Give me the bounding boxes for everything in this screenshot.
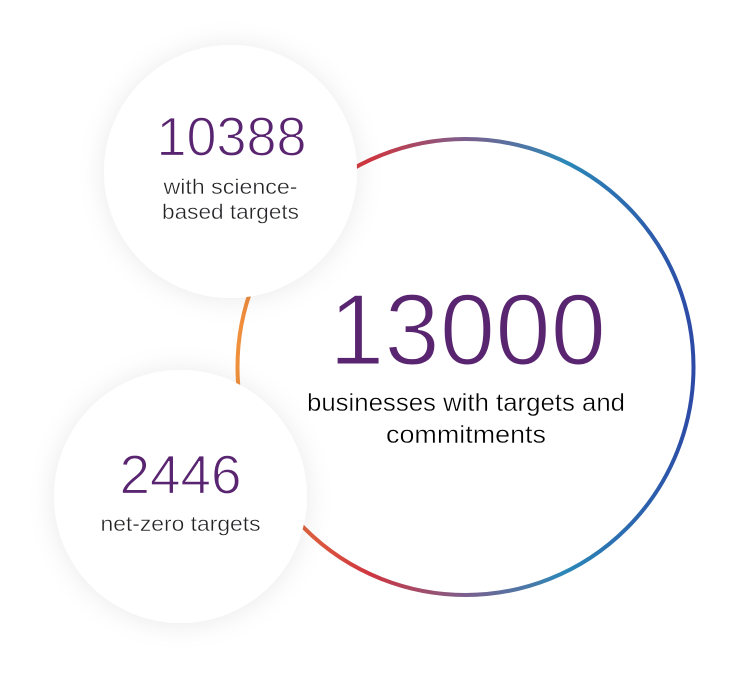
number: 2446: 2446 (120, 444, 242, 506)
label: net-zero targets: net-zero targets (100, 513, 260, 536)
number: 13000: 13000 (329, 274, 606, 386)
label: businesses with targets and commitments: commitments (386, 421, 546, 449)
number: 10388: 10388 (156, 106, 306, 168)
label: with science-based targets: with science- (162, 176, 298, 199)
gradient ring (238, 139, 694, 595)
label: with science-based targets: based targets (162, 201, 299, 224)
label: businesses with targets and commitments: businesses with targets and (307, 389, 625, 417)
panel: science-based targets circle (104, 45, 357, 298)
main stat: 13000 businesses (307, 274, 625, 449)
label: businesses with targets and commitments (307, 389, 625, 449)
panel: net-zero targets circle (54, 370, 307, 623)
label: with science-based targets (162, 176, 299, 224)
